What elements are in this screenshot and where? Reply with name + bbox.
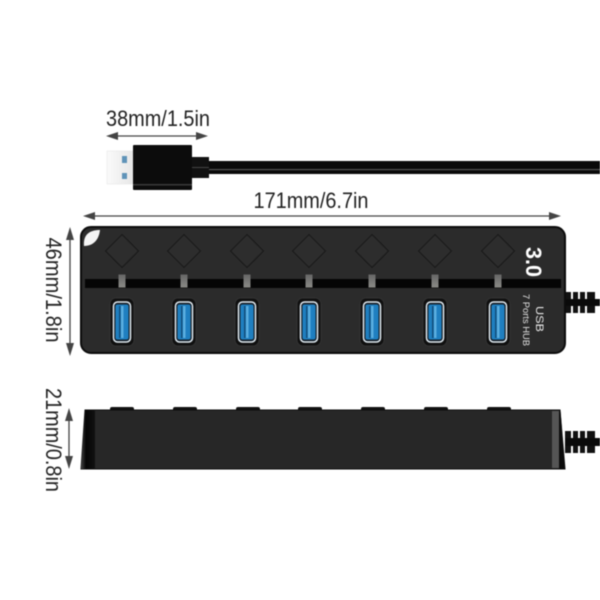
buttons bbox=[106, 234, 514, 268]
label 3.0: 3.0 bbox=[521, 247, 546, 277]
hub top view bbox=[81, 227, 600, 353]
hub body bbox=[81, 227, 565, 353]
side body bbox=[81, 410, 565, 469]
hub cable bbox=[565, 292, 600, 313]
hub corner hole bbox=[84, 230, 100, 246]
dimension: hub length bbox=[83, 188, 561, 220]
plug strain relief bbox=[192, 157, 209, 178]
dimension: plug length: 38mm/1.5in bbox=[106, 106, 210, 131]
side cable bbox=[565, 431, 600, 453]
USB plug and cable bbox=[107, 145, 600, 190]
cable bbox=[209, 161, 600, 174]
label USB: USB bbox=[533, 306, 545, 332]
side buttons bbox=[110, 407, 511, 412]
hub side view bbox=[81, 407, 600, 469]
black band bbox=[85, 279, 561, 288]
dimension: plug length bbox=[106, 106, 210, 140]
plug body bbox=[133, 145, 192, 190]
USB ports bbox=[110, 298, 510, 346]
dimension: hub height: 21mm/0.8in bbox=[41, 388, 66, 492]
dimension: hub length: 171mm/6.7in bbox=[254, 188, 368, 213]
indicator lights bbox=[118, 274, 502, 288]
dimension: hub width bbox=[41, 227, 74, 356]
plug metal tip bbox=[107, 151, 134, 184]
dimension: hub width: 46mm/1.8in bbox=[41, 238, 66, 342]
label 7 Ports HUB: 7 Ports HUB bbox=[521, 294, 531, 346]
